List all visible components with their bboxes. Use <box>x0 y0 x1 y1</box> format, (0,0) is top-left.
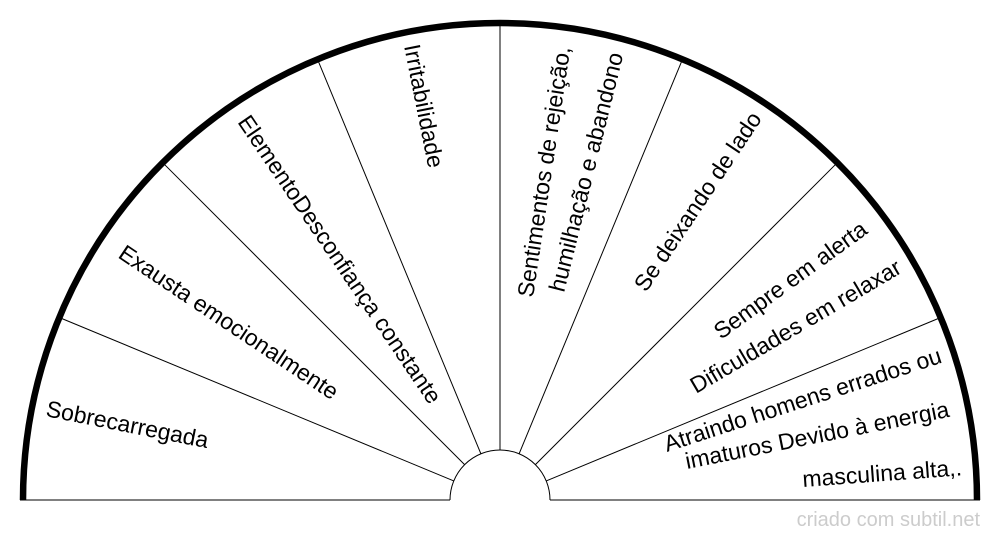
label: ElementoDesconfiança constante: ElementoDesconfiança constante <box>233 110 447 408</box>
label: Atraindo homens errados ou: Atraindo homens errados ou <box>661 342 945 457</box>
label: Exausta emocionalmente: Exausta emocionalmente <box>114 240 343 405</box>
label: Sentimentos de rejeição: Sentimentos de rejeição, <box>512 45 575 299</box>
label: Dificuldades em relaxar: Dificuldades em relaxar <box>685 254 906 398</box>
label: Irritabilidade: Irritabilidade <box>399 42 449 170</box>
label: Se deixando de lado: Se deixando de lado <box>629 107 767 296</box>
label: imaturos Devido à energia: imaturos Devido à energia <box>683 396 951 474</box>
label: humilhação e abandono: humilhação e abandono <box>544 50 628 294</box>
footer credit: criado com subtil.net <box>797 509 980 531</box>
label: Sempre em alerta: Sempre em alerta <box>709 215 872 344</box>
label: masculina alta: masculina alta,. <box>801 454 963 492</box>
label: Sobrecarregada: Sobrecarregada <box>44 395 211 453</box>
